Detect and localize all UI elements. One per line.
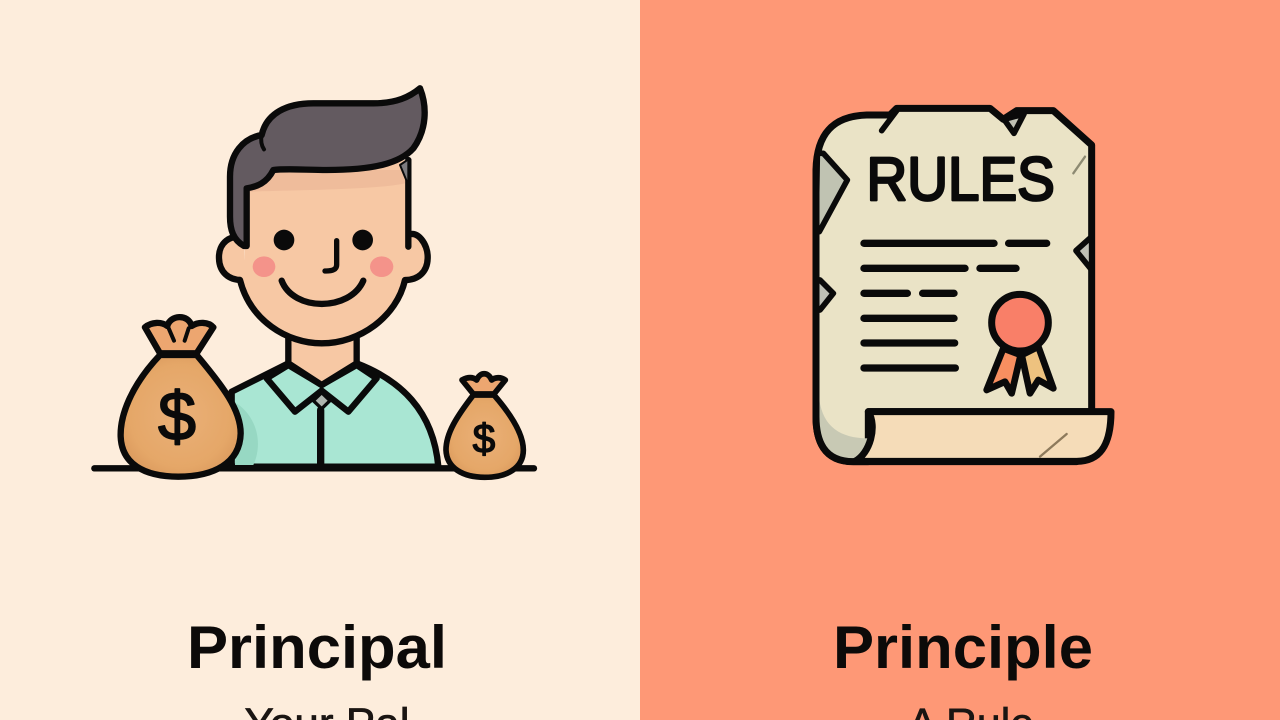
hair sideburn	[400, 159, 408, 185]
scroll bottom	[855, 412, 1111, 461]
ribbon tails	[987, 347, 1053, 393]
parchment	[816, 108, 1092, 462]
ears	[219, 234, 428, 280]
hair parting	[261, 135, 264, 149]
left curl	[818, 400, 868, 462]
face	[240, 160, 408, 343]
heading: principal: Principal	[187, 614, 447, 681]
bottom crease	[1040, 434, 1067, 457]
illustration: smiling man with money bags	[94, 88, 534, 477]
large money bag	[121, 317, 241, 477]
dollar sign: $	[158, 379, 196, 455]
cheeks	[253, 256, 393, 277]
scroll left edge	[816, 170, 1077, 462]
panel: principle	[640, 0, 1280, 720]
parchment tears	[816, 111, 1092, 310]
smile	[282, 281, 363, 304]
ground line	[94, 459, 534, 478]
scroll crease	[1073, 157, 1085, 173]
shirt	[232, 363, 438, 467]
face outline	[240, 160, 408, 343]
panel: principal	[0, 0, 640, 720]
nose	[325, 241, 337, 271]
text lines	[864, 243, 1047, 368]
seal	[992, 294, 1048, 351]
heading: principle: Principle	[833, 614, 1093, 681]
eyes	[274, 230, 373, 250]
small dollar sign: $	[473, 415, 495, 461]
small money bag	[446, 374, 523, 477]
neck	[288, 337, 357, 385]
forehead shadow	[250, 170, 405, 192]
illustration: rules scroll	[816, 108, 1111, 462]
heading: rules: RULES	[866, 145, 1055, 214]
hair	[230, 88, 425, 246]
